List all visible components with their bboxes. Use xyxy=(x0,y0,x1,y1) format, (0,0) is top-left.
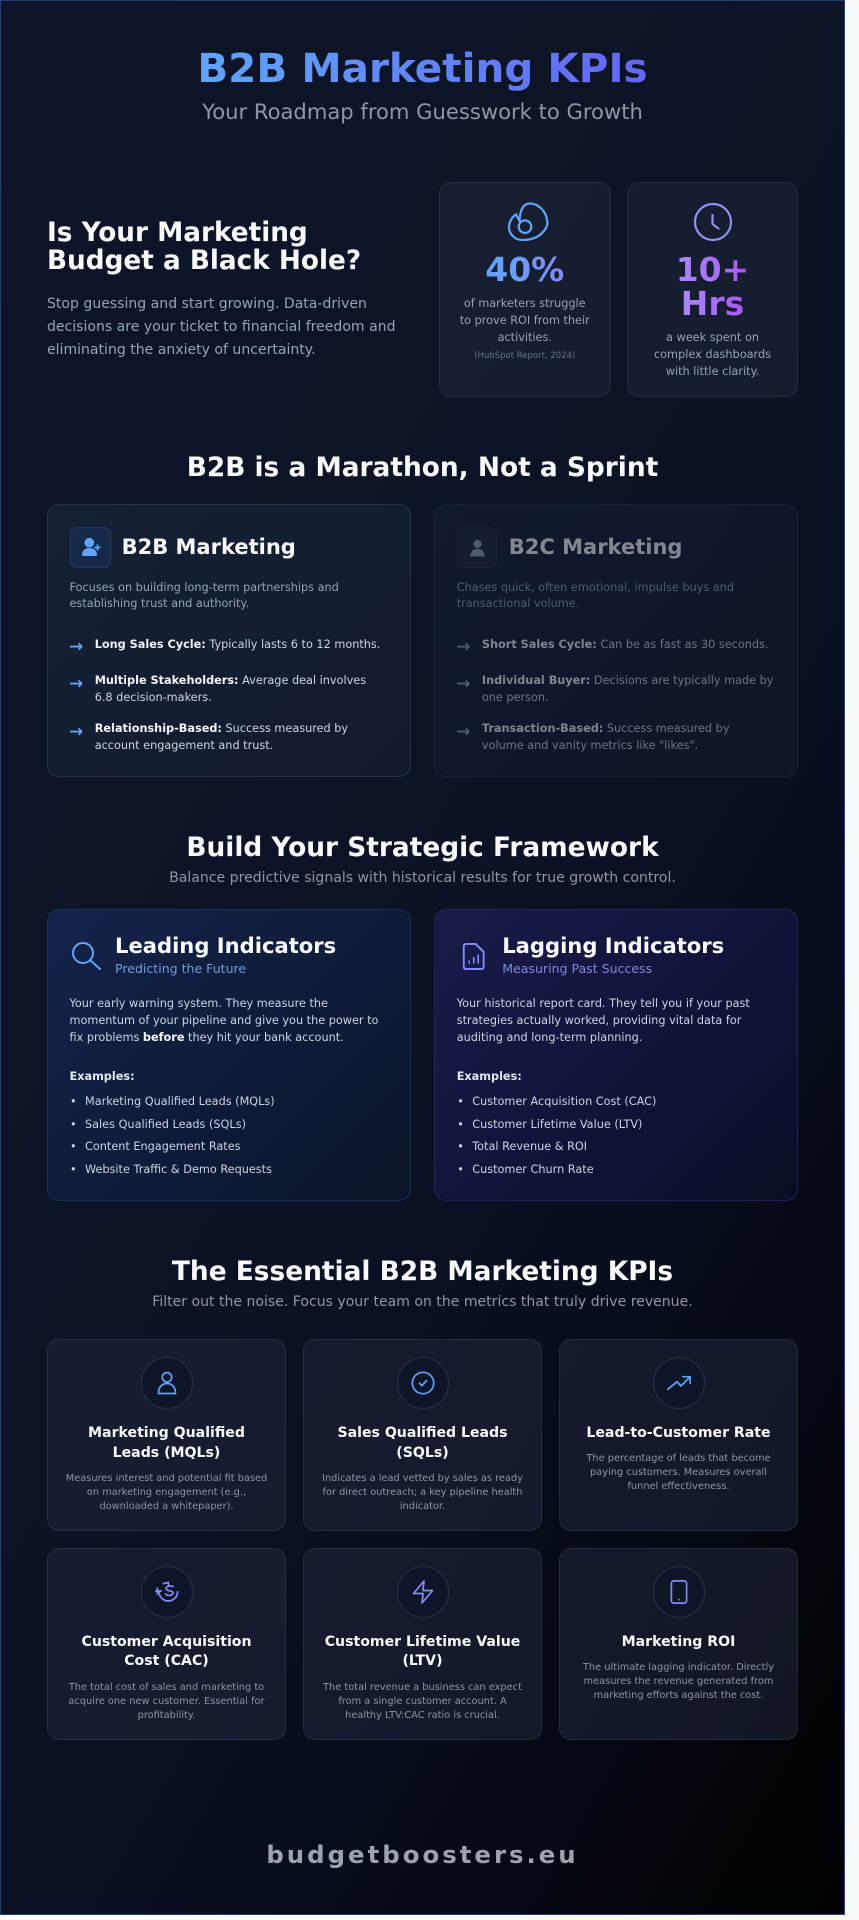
card description xyxy=(70,581,339,610)
KPI title: Sales Qualified Leads xyxy=(337,1425,508,1441)
KPI description: funnel effectiveness. xyxy=(627,1481,730,1492)
bullet list xyxy=(70,1095,275,1176)
stat: 10+ Hrs: Hrs xyxy=(681,284,744,323)
list item: stakeholders xyxy=(95,674,366,704)
bullet list: • xyxy=(457,1095,464,1108)
KPI description: The percentage of leads that become xyxy=(586,1453,771,1464)
panel: 10+ hrs stat card xyxy=(627,182,798,397)
KPI title: Lead-to-Customer Rate xyxy=(586,1425,771,1441)
icon: search xyxy=(72,942,101,970)
KPI description: The ultimate lagging indicator. Directly xyxy=(583,1662,774,1673)
KPI description: downloaded a whitepaper). xyxy=(99,1501,234,1512)
icon: check circle xyxy=(396,1357,448,1409)
bullet list: Customer Lifetime Value (LTV) xyxy=(472,1118,642,1130)
panel: lead-to-customer KPI xyxy=(559,1339,798,1531)
icon: user xyxy=(457,527,498,568)
source note: (HubSpot Report, 2024) xyxy=(474,351,575,361)
KPI title xyxy=(88,1425,245,1461)
arrow: → xyxy=(456,722,470,742)
KPI description: indicator. xyxy=(400,1501,445,1512)
title: B2B Marketing KPIs xyxy=(197,44,648,92)
hero heading xyxy=(47,218,361,276)
list item: stakeholders: Multiple Stakeholders: Average deal involves xyxy=(95,674,366,687)
panel: ROI KPI xyxy=(559,1548,798,1740)
icon: acquisition cost xyxy=(140,1566,192,1618)
card title: B2C Marketing xyxy=(509,535,682,559)
KPI description: The total revenue a business can expect xyxy=(323,1682,522,1692)
list item: stakeholders: 6.8 decision-makers. xyxy=(95,691,212,704)
KPI title: (SQLs) xyxy=(396,1445,449,1461)
list item: individual buyer: one person. xyxy=(482,691,549,704)
KPI description xyxy=(586,1453,771,1492)
card title: Lagging Indicators xyxy=(502,933,724,958)
KPI title: Cost (CAC) xyxy=(124,1653,209,1669)
KPI title: Marketing Qualified xyxy=(88,1425,245,1441)
heading: essential KPIs: The Essential B2B Marketing KPIs xyxy=(172,1256,673,1287)
bullet list: Customer Churn Rate xyxy=(472,1162,594,1176)
bullet list: Marketing Qualified Leads (MQLs) xyxy=(85,1095,275,1108)
subtitle: Your Roadmap from Guesswork to Growth xyxy=(202,99,643,124)
KPI title xyxy=(325,1634,520,1669)
card subtitle: Predicting the Future xyxy=(115,961,246,976)
card text xyxy=(70,997,378,1044)
bullet list: • xyxy=(70,1118,77,1130)
stat description: of marketers struggle xyxy=(464,296,586,310)
footer brand: budgetboosters.eu xyxy=(266,1840,579,1869)
stat description xyxy=(654,330,771,378)
KPI description xyxy=(582,1662,774,1701)
KPI title: Customer Acquisition xyxy=(81,1634,252,1650)
list item: relationship xyxy=(95,722,348,752)
bullet list: Total Revenue & ROI xyxy=(472,1140,587,1153)
arrow: → xyxy=(69,637,83,657)
icon: lightning bolt xyxy=(396,1566,448,1618)
panel: lagging indicators xyxy=(434,909,798,1201)
list item: relationship: Relationship-Based: Success measured by xyxy=(95,722,348,735)
card title: B2B Marketing xyxy=(122,535,296,559)
card description: transactional volume. xyxy=(457,597,579,610)
KPI description: paying customers. Measures overall xyxy=(590,1467,767,1478)
card description xyxy=(457,581,734,610)
icon: clock xyxy=(694,202,732,242)
list item: individual buyer: Individual Buyer: Decisions are typically made by xyxy=(482,674,773,687)
KPI description xyxy=(323,1682,522,1720)
KPI description xyxy=(66,1473,267,1512)
stat description xyxy=(460,296,590,344)
hero paragraph xyxy=(47,296,396,358)
hero heading: Is Your Marketing xyxy=(47,218,308,248)
panel: B2B marketing xyxy=(47,504,411,777)
card text: fix problems before they hit your bank account. xyxy=(70,1031,344,1044)
bullet list: Website Traffic & Demo Requests xyxy=(85,1162,272,1176)
panel: LTV KPI xyxy=(303,1548,542,1740)
bullet list: • xyxy=(457,1162,464,1176)
KPI description: healthy LTV:CAC ratio is crucial. xyxy=(345,1710,500,1720)
panel: 40% stat card xyxy=(439,182,610,397)
list item: short sales cycle: Short Sales Cycle: Can be as fast as 30 seconds. xyxy=(482,638,769,651)
bullet list: • xyxy=(70,1140,77,1153)
arrow: → xyxy=(456,674,470,694)
panel: CAC KPI xyxy=(47,1548,286,1740)
KPI description: for direct outreach; a key pipeline health xyxy=(322,1487,522,1498)
icon: trend up xyxy=(652,1357,704,1409)
KPI description: measures the revenue generated from xyxy=(584,1676,773,1687)
examples label: Examples: xyxy=(457,1070,522,1083)
bullet list: • xyxy=(457,1140,464,1153)
bullet list: • xyxy=(70,1095,77,1108)
heading: framework: Build Your Strategic Framework xyxy=(186,832,659,863)
KPI description: Indicates a lead vetted by sales as ready xyxy=(322,1473,523,1484)
arrow: → xyxy=(456,637,470,657)
bullet list: Sales Qualified Leads (SQLs) xyxy=(85,1118,246,1130)
stat description: to prove ROI from their xyxy=(460,314,590,326)
bullet list: • xyxy=(70,1162,77,1176)
KPI description xyxy=(68,1682,265,1720)
card text: strategies actually worked, providing vital data for xyxy=(457,1014,741,1027)
heading: marathon: B2B is a Marathon, Not a Sprint xyxy=(187,452,658,483)
list item: transaction: volume and vanity metrics like "likes". xyxy=(482,739,698,752)
hero paragraph: eliminating the anxiety of uncertainty. xyxy=(47,342,316,358)
stat description: complex dashboards xyxy=(654,348,771,360)
KPI description: The total cost of sales and marketing to xyxy=(69,1682,264,1692)
KPI title: Leads (MQLs) xyxy=(113,1445,220,1461)
stat: 10+ Hrs: 10+ xyxy=(676,250,749,289)
section subheading: Filter out the noise. Focus your team on the metrics that truly drive revenue. xyxy=(152,1294,693,1310)
KPI title: Customer Lifetime Value xyxy=(325,1634,520,1650)
list item: individual buyer xyxy=(482,674,773,704)
hero paragraph: decisions are your ticket to financial freedom and xyxy=(47,319,396,335)
icon: report file xyxy=(462,943,485,970)
KPI description: acquire one new customer. Essential for xyxy=(68,1696,265,1706)
KPI title xyxy=(81,1634,252,1669)
card text: Your early warning system. They measure the xyxy=(70,997,328,1010)
panel: B2C marketing xyxy=(434,504,798,777)
KPI description: on marketing engagement (e.g., xyxy=(87,1487,246,1498)
hero heading: Budget a Black Hole? xyxy=(47,246,361,276)
list item: long sales cycle: Long Sales Cycle: Typically lasts 6 to 12 months. xyxy=(95,638,380,651)
panel: SQL KPI xyxy=(303,1339,542,1531)
icon: mobile device xyxy=(652,1566,704,1618)
arrow: → xyxy=(69,674,83,694)
KPI title xyxy=(337,1425,508,1461)
list item: transaction: Transaction-Based: Success measured by xyxy=(482,722,729,735)
stat description: a week spent on xyxy=(666,330,759,344)
card description: Focuses on building long-term partnerships and xyxy=(70,581,339,594)
stat: 40%: 40% xyxy=(485,250,564,289)
examples label: Examples: xyxy=(70,1070,135,1083)
KPI description xyxy=(322,1473,523,1512)
card title: Leading Indicators xyxy=(115,933,336,958)
card text xyxy=(456,997,750,1044)
KPI description: marketing efforts against the cost. xyxy=(594,1690,763,1701)
card subtitle: Measuring Past Success xyxy=(502,961,652,976)
list item: transaction xyxy=(482,722,730,752)
stat: 10+ Hrs xyxy=(676,250,749,323)
icon: black hole xyxy=(508,202,548,242)
icon: person xyxy=(140,1357,192,1409)
bullet list: Customer Acquisition Cost (CAC) xyxy=(472,1095,656,1108)
card description: establishing trust and authority. xyxy=(70,597,249,610)
icon: user plus xyxy=(70,527,110,568)
bullet list: • xyxy=(457,1118,464,1130)
panel: MQL KPI xyxy=(47,1339,286,1531)
panel: leading indicators xyxy=(47,909,411,1201)
card text: Your historical report card. They tell you if your past xyxy=(457,997,750,1010)
KPI description: from a single customer account. A xyxy=(338,1696,507,1706)
stat description: with little clarity. xyxy=(666,364,759,378)
list item: relationship: account engagement and trust. xyxy=(95,739,273,752)
card description: Chases quick, often emotional, impulse buys and xyxy=(457,581,734,594)
KPI description: profitability. xyxy=(138,1710,195,1720)
bullet list xyxy=(457,1095,656,1176)
section subheading: Balance predictive signals with historical results for true growth control. xyxy=(169,870,676,886)
arrow: → xyxy=(69,722,83,742)
stat description: activities. xyxy=(498,330,552,344)
bullet list: Content Engagement Rates xyxy=(85,1140,241,1153)
KPI title: Marketing ROI xyxy=(622,1634,735,1650)
KPI title: (LTV) xyxy=(402,1653,443,1669)
card text: momentum of your pipeline and give you the power to xyxy=(70,1014,378,1027)
hero paragraph: Stop guessing and start growing. Data-driven xyxy=(47,296,367,312)
KPI description: Measures interest and potential fit based xyxy=(66,1473,267,1484)
card text: auditing and long-term planning. xyxy=(457,1031,642,1044)
